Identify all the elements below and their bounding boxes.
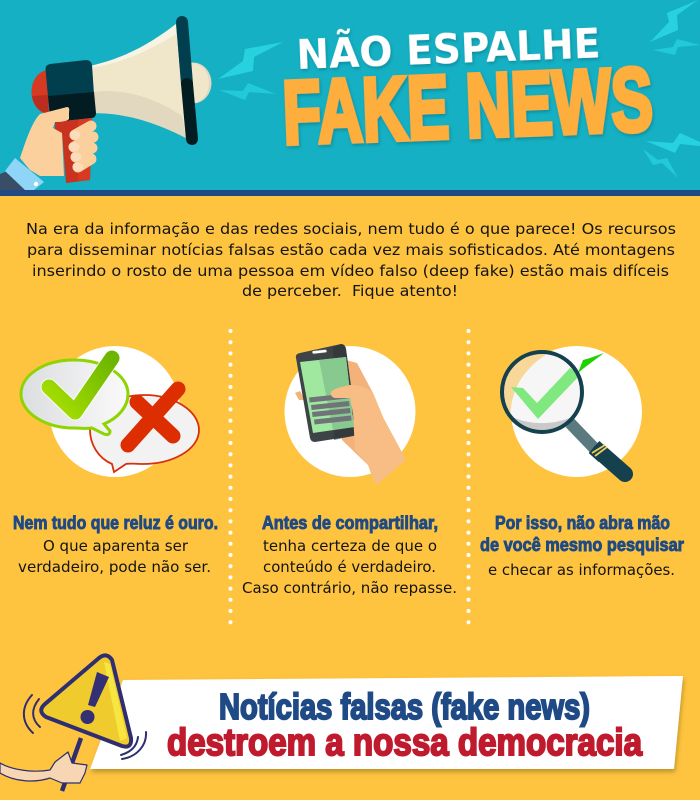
header banner [0,0,700,196]
text block: column 2: conteúdo é verdadeiro. [263,558,436,576]
intro paragraph [26,220,676,300]
icon: lightning bolts [218,0,700,178]
icon: hand holding smartphone [295,344,405,484]
text block: column 1: verdadeiro, pode não ser. [18,558,211,576]
banner line 1: Notícias falsas (fake news) [219,686,590,727]
text block: column 1 [13,513,218,576]
text block: column 3 [480,513,684,579]
text block: column 3: de você mesmo pesquisar [480,535,684,555]
banner line 2: destroem a nossa democracia [167,722,643,764]
panel: column 2 icon [284,344,416,484]
text block: column 2: Antes de compartilhar, [262,513,438,533]
panel: column 3 icon [502,346,642,477]
icon: red speech bubble with X [90,389,199,472]
intro paragraph: inserindo o rosto de uma pessoa em vídeo falso (deep fake) estão mais difíceis [32,262,669,280]
text block: column 3: e checar as informações. [488,561,675,579]
icon: magnifying glass [502,352,625,474]
text block: column 2: tenha certeza de que o [263,537,437,555]
intro paragraph: para disseminar notícias falsas estão cada vez mais sofisticados. Até montagens [27,241,675,259]
callout banner [90,676,683,769]
text block: column 2 [242,513,457,597]
title line 1: NÃO ESPALHE [296,18,601,79]
text block: column 2: Caso contrário, não repasse. [242,579,457,597]
icon: megaphone with hand [0,22,212,190]
dotted column dividers [230,331,468,626]
intro paragraph: Na era da informação e das redes sociais, nem tudo é o que parece! Os recursos [26,220,676,238]
intro paragraph: de perceber. Fique atento! [242,282,458,300]
icon: green check brush stroke [578,353,604,373]
text block: column 1: O que aparenta ser [43,537,189,555]
panel: column 1 icon [21,346,199,477]
icon: warning sign held by hand [0,655,146,791]
icon: green speech bubble with check [21,358,128,435]
text block: column 1: Nem tudo que reluz é ouro. [13,513,218,533]
text block: column 3: Por isso, não abra mão [495,513,670,533]
